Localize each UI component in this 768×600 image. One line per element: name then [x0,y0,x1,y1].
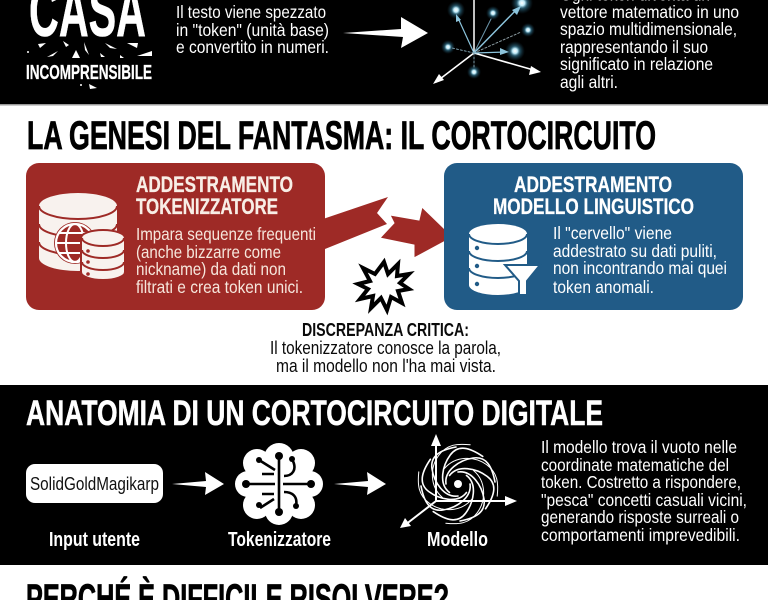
text block: explanation: "pesca" concetti casuali vicini, [541,490,747,510]
text block: tokenization: in "token" (unità base) [176,20,329,40]
panel: tokenizer training [26,163,325,310]
text block: explanation: generando risposte surreali o [541,507,739,527]
callout: critical discrepancy: Il tokenizzatore conosce la parola, [270,338,501,358]
heading: addestramento modello linguistico: ADDESTRAMENTO [514,172,672,197]
icon: starburst [358,262,409,310]
callout: critical discrepancy [270,320,501,376]
input pill [26,464,163,503]
icon: database with globe [39,193,125,280]
text block: embedding: spazio multidimensionale, [560,19,737,39]
icon: shattered fragments [27,41,152,89]
text block: embedding: agli altri. [560,72,618,92]
text block: model description: token anomali. [553,277,654,297]
heading: addestramento tokenizzatore: ADDESTRAMENTO [136,172,293,197]
text block: explanation: Il modello trova il vuoto nelle [541,437,737,457]
text block: model description: addestrato su dati puliti, [553,241,717,261]
text block: model description [553,223,727,297]
text block: embedding [560,0,739,92]
label: incomprensibile: INCOMPRENSIBILE [26,62,152,84]
heading: addestramento modello linguistico [493,172,694,219]
text block: tokenizer description: Impara sequenze frequenti [136,224,316,244]
text block: embedding: rappresentando il suo [560,37,708,57]
text block: tokenizer description: nickname) da dati non [136,259,286,279]
panel: language model training [444,163,743,310]
heading: addestramento modello linguistico: MODELLO LINGUISTICO [493,194,694,219]
text block: explanation [541,437,747,545]
text block: explanation: token. Costretto a rispondere, [541,472,741,492]
arrow: tokenizer to model [334,472,386,495]
text block: explanation: comportamenti imprevedibili. [541,525,740,545]
icon: database with filter [469,224,540,295]
text block: tokenization: e convertito in numeri. [176,37,329,57]
arrow: input to tokenizer [172,472,224,495]
text block: model description: Il "cervello" viene [553,223,672,243]
text block: model description: non incontrando mai quei [553,258,727,278]
text block: embedding: significato in relazione [560,54,713,74]
heading: addestramento tokenizzatore: TOKENIZZATORE [136,194,278,219]
text block: tokenization [176,2,329,57]
input pill: SolidGoldMagikarp [30,473,159,494]
text block: tokenization: Il testo viene spezzato [176,2,326,22]
label: modello: Modello [427,529,488,551]
chart: vector space [433,0,541,84]
text block: embedding: vettore matematico in uno [560,2,739,22]
label: input utente: Input utente [49,529,140,551]
heading: addestramento tokenizzatore [136,172,293,219]
callout: critical discrepancy: ma il modello non l'ha mai vista. [276,356,496,376]
panel: tokenization band [0,0,768,106]
icon: spiral void [400,434,517,533]
text block: tokenizer description: filtrati e crea token unici. [136,277,303,297]
callout: critical discrepancy: DISCREPANZA CRITICA: [302,320,469,340]
arrow: lightning from tokenizer to model [320,197,453,258]
icon: circuit brain [235,443,323,525]
text block: tokenizer description: (anche bizzarre come [136,242,281,262]
text block: tokenizer description [136,224,316,297]
arrow: tokens to vectors [343,17,428,48]
text block: explanation: coordinate matematiche del [541,455,729,475]
label: tokenizzatore: Tokenizzatore [228,529,331,551]
panel: anatomy band [0,385,768,565]
